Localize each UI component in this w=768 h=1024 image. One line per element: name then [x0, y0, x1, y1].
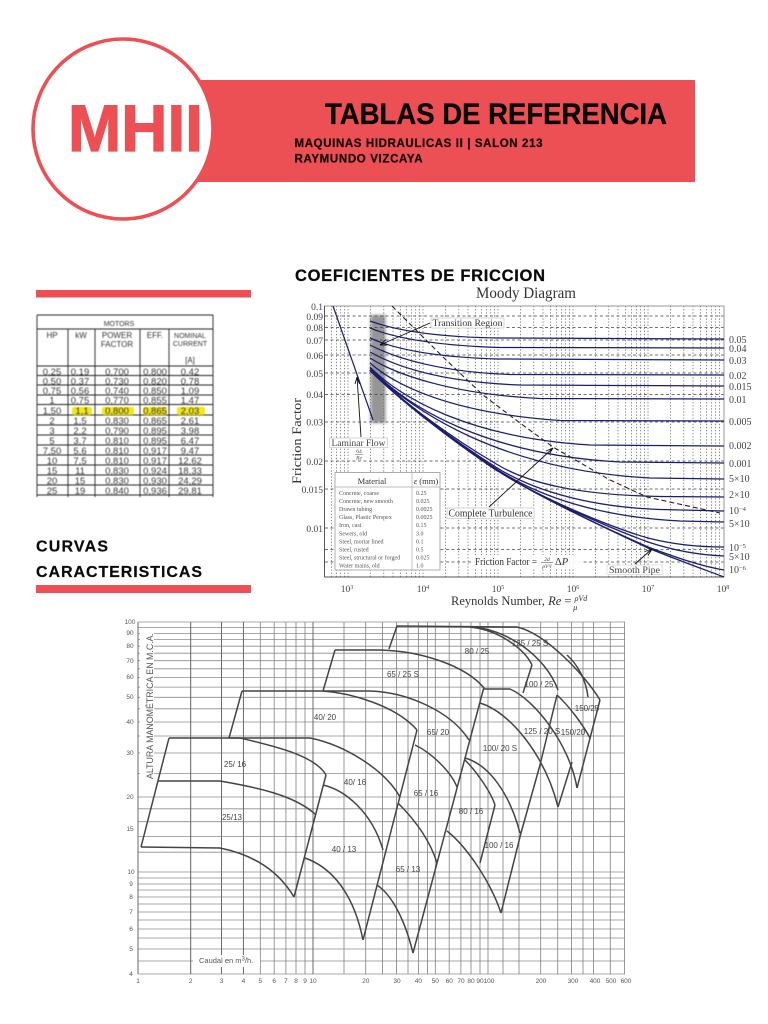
- pump model labels: 150/20: [561, 728, 586, 737]
- x axis labels: 90: [476, 978, 484, 985]
- table rows: 0,19: [71, 367, 89, 378]
- y axis labels: 0.015: [302, 486, 323, 496]
- friction curves: [333, 306, 724, 577]
- x axis labels: 10: [492, 585, 501, 595]
- roughness labels: 5×10: [729, 474, 750, 485]
- material roughness table: 3.0: [416, 532, 424, 538]
- table rows: 18,33: [178, 466, 202, 477]
- table rows: 0,917: [143, 446, 167, 457]
- material roughness table: [335, 472, 440, 570]
- axes frame: [324, 306, 724, 577]
- x axis labels: 8: [726, 585, 729, 591]
- heading: curvas caracteristicas: [36, 538, 202, 581]
- material roughness table: Steel, rusted: [339, 548, 369, 554]
- y axis labels: 100: [125, 619, 136, 626]
- table rows: 25: [47, 486, 57, 497]
- x axis labels: 5: [258, 978, 262, 985]
- x axis labels: 10: [567, 585, 576, 595]
- pump model labels: 125 / 25 S: [512, 639, 548, 648]
- roughness labels: 0.02: [729, 371, 746, 382]
- table rows: [43, 367, 202, 497]
- callout: friction factor formula: Friction Factor =: [475, 557, 537, 568]
- pump model labels: 125 / 20 S: [524, 727, 560, 736]
- x axis title: Caudal en m: [199, 956, 242, 965]
- material roughness table: 0.025: [416, 556, 430, 562]
- table rows: 0,820: [143, 376, 167, 388]
- table rows: 0,855: [143, 396, 167, 406]
- roughness labels: 0.001: [729, 459, 752, 470]
- y axis labels: 0.04: [306, 391, 323, 401]
- table rows: 0,800: [105, 406, 129, 417]
- callout: friction factor formula: ΔP: [555, 557, 569, 568]
- x axis title: /h.: [245, 956, 253, 965]
- roughness labels: [729, 335, 752, 576]
- table rows: 0,78: [181, 376, 199, 388]
- pump model labels: 40/ 16: [344, 778, 367, 787]
- table rows: 0,50: [43, 376, 61, 388]
- pump model labels: 40 / 13: [332, 845, 357, 854]
- column headers: NOMINAL: [174, 333, 206, 340]
- x axis title: 3: [242, 956, 246, 962]
- x axis labels: 20: [362, 978, 370, 985]
- x axis labels: 70: [457, 978, 465, 985]
- x axis labels: 80: [467, 978, 475, 985]
- y axis labels: 0.08: [306, 324, 323, 334]
- roughness labels: −5: [739, 543, 746, 550]
- x axis labels: 10: [341, 585, 350, 595]
- table rows: 0,42: [181, 367, 199, 378]
- table rows: 0,865: [143, 416, 167, 427]
- table rows: 0,75: [71, 396, 89, 406]
- x axis labels: 3: [350, 585, 353, 591]
- x axis labels: 6: [576, 585, 579, 591]
- table rows: 3: [49, 426, 55, 437]
- y axis labels: 30: [126, 750, 134, 757]
- pump model labels: 150/25: [575, 704, 600, 713]
- callout: laminar flow: 64: [356, 449, 362, 455]
- pump model labels: 65/ 20: [427, 728, 450, 737]
- x axis labels: 400: [590, 978, 601, 985]
- table rows: 0,830: [105, 416, 129, 427]
- y axis labels: 50: [126, 694, 134, 701]
- header banner: [33, 39, 695, 219]
- table rows: 0,930: [143, 476, 167, 487]
- y axis labels: 4: [129, 971, 133, 978]
- y axis labels: [125, 619, 136, 978]
- roughness labels: 0.04: [729, 344, 746, 355]
- table rows: 1,1: [75, 406, 89, 417]
- heading: curvas caracteristicas: CARACTERISTICAS: [36, 564, 202, 581]
- callout: friction factor formula: [473, 555, 583, 570]
- y axis labels: 70: [126, 658, 134, 665]
- x axis labels: 200: [536, 978, 547, 985]
- x axis labels: 8: [294, 978, 298, 985]
- table rows: 24,29: [178, 476, 202, 487]
- y axis labels: 20: [126, 794, 134, 801]
- material roughness table: 0.0025: [416, 507, 432, 513]
- x axis labels: 300: [568, 978, 579, 985]
- x axis title: ρVd: [574, 594, 588, 603]
- table rows: 0,850: [143, 386, 167, 397]
- table rows: 0,730: [105, 376, 129, 388]
- vertical grid: [138, 622, 624, 974]
- grid: [325, 316, 724, 562]
- column headers: HP: [46, 331, 58, 340]
- column headers: kW: [75, 331, 87, 340]
- x axis labels: 10: [417, 585, 426, 595]
- callout: smooth pipe: [607, 549, 662, 576]
- callout: complete turbulence: [447, 448, 553, 520]
- y axis labels: 0.05: [306, 370, 323, 380]
- callout: laminar flow: Re: [355, 456, 362, 462]
- motors table: [37, 315, 213, 497]
- y axis labels: 60: [126, 674, 134, 681]
- table rows: 1,50: [43, 406, 61, 417]
- x axis labels: 7: [651, 585, 654, 591]
- y axis labels: 7: [129, 909, 133, 916]
- y axis labels: 9: [129, 881, 133, 888]
- roughness labels: 0.01: [729, 395, 746, 406]
- table rows: 0,700: [105, 367, 129, 378]
- y axis labels: 90: [126, 630, 134, 637]
- table rows: 0,895: [143, 426, 167, 437]
- callout: laminar flow: Laminar Flow: [332, 439, 386, 449]
- table rows: 1,47: [181, 396, 199, 406]
- table rows: 11: [75, 466, 85, 477]
- complete turbulence dashed line: [392, 306, 720, 513]
- pump model labels: 100/ 20 S: [483, 744, 517, 753]
- transition region band: [370, 315, 386, 423]
- roughness labels: 2×10: [729, 490, 750, 501]
- x axis labels: 2: [189, 978, 193, 985]
- x axis labels: 50: [432, 978, 439, 985]
- y axis labels: 0.07: [306, 337, 323, 347]
- table rows: 0,865: [143, 406, 167, 417]
- y axis labels: 0.01: [306, 525, 323, 535]
- table rows: 0,800: [143, 367, 167, 378]
- material roughness table: Concrete, coarse: [339, 491, 379, 497]
- callout: complete turbulence: Complete Turbulence: [448, 508, 533, 520]
- material roughness table: Concrete, new smooth: [339, 499, 393, 505]
- table rows: 3,7: [73, 436, 87, 447]
- y axis title: ALTURA MANOMÉTRICA EN M.C.A.: [145, 633, 156, 779]
- x axis title: Reynolds Number, Re =: [451, 594, 571, 608]
- x axis labels: 9: [303, 978, 307, 985]
- y axis labels: 80: [126, 643, 134, 650]
- y axis labels: 5: [129, 946, 133, 953]
- logo circle: [33, 39, 213, 219]
- roughness labels: 10: [729, 506, 739, 517]
- table rows: 1,09: [181, 386, 199, 397]
- table rows: 5,6: [73, 446, 87, 457]
- pump model labels: 65 / 13: [396, 865, 421, 874]
- material roughness table: 0.1: [416, 540, 424, 546]
- x axis labels: 60: [446, 978, 453, 985]
- red rule below heading: [36, 585, 251, 593]
- label background: [140, 628, 154, 780]
- roughness labels: 10: [729, 543, 739, 554]
- title: TABLAS DE REFERENCIA: [325, 98, 667, 131]
- laminar line: [333, 306, 373, 420]
- y axis labels: 0.09: [306, 313, 323, 323]
- material roughness table: Iron, cast: [339, 523, 362, 529]
- horizontal grid: [138, 622, 625, 974]
- material roughness table: 0.15: [416, 523, 426, 529]
- column headers: [46, 331, 208, 365]
- table rows: 0,37: [71, 376, 89, 388]
- table rows: 0,740: [105, 386, 129, 397]
- x axis labels: 40: [415, 978, 422, 985]
- callout: friction factor formula: ρV²l: [541, 564, 552, 570]
- y axis labels: 10: [127, 869, 135, 876]
- material roughness table: 0.0025: [416, 515, 432, 521]
- table title: MOTORS: [104, 321, 135, 328]
- table rows: 1: [49, 396, 55, 406]
- roughness labels: −4: [739, 506, 747, 513]
- pump curves: [141, 626, 600, 953]
- table rows: 0,936: [143, 486, 167, 497]
- table rows: 15: [47, 466, 57, 477]
- pump model labels: 25/13: [222, 813, 243, 822]
- pump model labels: 100 / 16: [485, 841, 514, 850]
- table rows: 2,61: [181, 416, 199, 427]
- y axis labels: 0.06: [306, 352, 323, 362]
- column headers: EFF.: [147, 331, 163, 340]
- subtitle line 1: MAQUINAS HIDRAULICAS II | SALON 213: [294, 138, 542, 150]
- roughness labels: 0.015: [729, 382, 752, 393]
- material roughness table: 0.025: [416, 499, 430, 505]
- pump characteristic curves chart: [125, 619, 632, 985]
- table rows: 2,03: [181, 406, 199, 417]
- roughness labels: 0.03: [729, 356, 746, 367]
- table rows: 6,47: [181, 436, 199, 447]
- x axis labels: 3: [220, 978, 224, 985]
- roughness labels: −6: [739, 565, 747, 572]
- table rows: 7,5: [73, 456, 87, 467]
- x axis labels: 1: [136, 978, 140, 985]
- material roughness table: Glass, Plastic Perspex: [339, 515, 392, 521]
- moody diagram: [290, 285, 752, 612]
- x axis title: μ: [572, 603, 577, 612]
- table rows: 0,810: [105, 446, 129, 457]
- pump model labels: 80 / 25: [465, 647, 490, 656]
- x axis labels: 600: [621, 978, 632, 985]
- pump model labels: 40/ 20: [314, 713, 337, 722]
- y axis labels: 40: [126, 719, 134, 726]
- table rows: 0,840: [105, 486, 129, 497]
- pump model labels: [222, 639, 600, 874]
- y axis labels: 6: [129, 926, 133, 933]
- table rows: 15: [75, 476, 85, 487]
- table rows: 0,75: [43, 386, 61, 397]
- table rows: 20: [47, 476, 57, 487]
- highlighted row: [72, 407, 205, 415]
- y axis labels: 15: [126, 826, 134, 833]
- x axis labels: 6: [272, 978, 276, 985]
- material roughness table: ε (mm): [414, 476, 438, 486]
- table rows: 0,810: [105, 436, 129, 447]
- roughness labels: 0.002: [729, 441, 752, 452]
- x axis labels: 5: [501, 585, 504, 591]
- table rows: 0,810: [105, 456, 129, 467]
- roughness labels: 5×10: [729, 552, 750, 563]
- x axis labels: 500: [606, 978, 617, 985]
- heading: curvas caracteristicas: CURVAS: [36, 538, 108, 556]
- table rows: 2,2: [73, 426, 87, 437]
- x axis labels: [341, 585, 729, 595]
- x axis labels: 4: [426, 585, 429, 591]
- table rows: 0,830: [105, 476, 129, 487]
- red rule above motors table: [36, 290, 251, 298]
- y axis title: Friction Factor: [290, 397, 304, 484]
- table rows: 2: [49, 416, 55, 427]
- table rows: 0,770: [105, 396, 129, 406]
- table rows: 0,830: [105, 466, 129, 477]
- pump model labels: 100 / 25: [525, 680, 554, 689]
- y axis labels: 0.1: [311, 303, 323, 313]
- x axis labels: 4: [242, 978, 246, 985]
- table rows: 12,62: [178, 456, 202, 467]
- table rows: 0,924: [143, 466, 167, 477]
- material roughness table: 0.25: [416, 491, 426, 497]
- x axis labels: 7: [284, 978, 288, 985]
- y axis labels: 0.02: [306, 458, 323, 468]
- x axis labels: 100: [484, 978, 495, 985]
- table rows: 0,917: [143, 456, 167, 467]
- material roughness table: Sewers, old: [339, 532, 367, 538]
- x axis labels: 10: [309, 978, 317, 985]
- roughness labels: 0.05: [729, 335, 746, 346]
- table rows: 19: [75, 486, 85, 497]
- roughness labels: 5×10: [729, 519, 750, 530]
- table rows: 0,790: [105, 426, 129, 437]
- material roughness table: Steel, structural or forged: [339, 554, 400, 562]
- pump model labels: 65 / 16: [414, 789, 439, 798]
- table rows: 0,25: [43, 367, 61, 378]
- x axis labels: 30: [393, 978, 401, 985]
- table rows: 10: [47, 456, 57, 467]
- column headers: FACTOR: [101, 340, 133, 349]
- material roughness table: 1.0: [416, 564, 424, 570]
- table rows: 9,47: [181, 446, 199, 457]
- heading: coeficientes de friccion: COEFICIENTES DE FRICCION: [295, 267, 545, 285]
- roughness labels: 0.005: [729, 417, 752, 428]
- table rows: 3,98: [181, 426, 199, 437]
- material roughness table: Steel, mortar lined: [339, 540, 384, 546]
- x axis labels: 10: [642, 585, 651, 595]
- column headers: POWER: [102, 331, 132, 340]
- y axis labels: 0.03: [306, 418, 323, 428]
- subtitle line 2: RAYMUNDO VIZCAYA: [294, 154, 422, 166]
- material roughness table: Drawn tubing: [339, 507, 372, 513]
- x axis labels: 10: [717, 585, 726, 595]
- y axis labels: 8: [129, 894, 133, 901]
- callout: laminar flow: [330, 377, 388, 462]
- table rows: 29,81: [178, 486, 202, 497]
- pump model labels: 65 / 25 S: [387, 670, 419, 679]
- x axis labels: [136, 978, 632, 985]
- callout: friction factor formula: 2d: [544, 557, 550, 563]
- roughness labels: 10: [729, 565, 739, 576]
- callout: smooth pipe: Smooth Pipe: [609, 566, 660, 576]
- pump model labels: 80 / 16: [459, 807, 484, 816]
- pump model labels: 25/ 16: [224, 760, 247, 769]
- logo text: MHII: [68, 91, 203, 165]
- red title bar: [190, 80, 695, 182]
- table rows: 1,5: [73, 416, 87, 427]
- column headers: CURRENT: [173, 341, 208, 348]
- table rows: 5: [49, 436, 55, 447]
- callout: transition region: [380, 318, 504, 345]
- table rows: 0,56: [71, 386, 89, 397]
- y axis labels: [302, 303, 323, 535]
- moody title: Moody Diagram: [476, 285, 576, 302]
- callout: transition region: Transition Region: [432, 319, 503, 329]
- material roughness table: Material: [358, 476, 387, 486]
- material roughness table: Water mains, old: [339, 564, 380, 570]
- column headers: [A]: [185, 356, 195, 365]
- material roughness table: 0.5: [416, 548, 424, 554]
- table rows: 0,895: [143, 436, 167, 447]
- table rows: 7,50: [43, 446, 61, 457]
